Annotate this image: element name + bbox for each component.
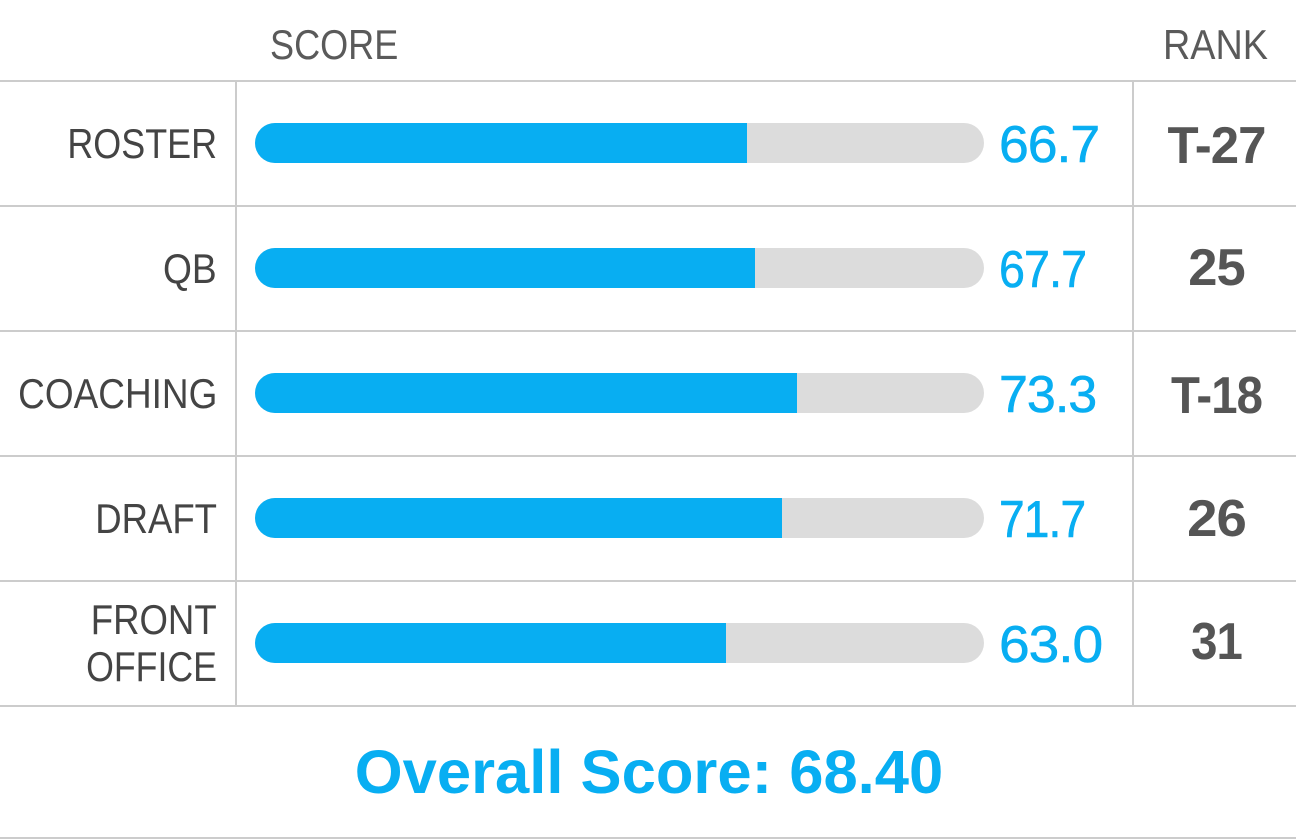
row label: QB: QB: [163, 245, 217, 292]
rank: draft: 26: [1187, 490, 1246, 548]
rank: roster: T-27: [1167, 117, 1266, 175]
rank: QB: 25: [1188, 239, 1245, 297]
bar: draft: [255, 498, 984, 538]
rank: front office: 31: [1191, 613, 1242, 671]
bar: roster: [255, 123, 984, 163]
bar: front office: [255, 623, 984, 663]
bar: coaching: [255, 373, 984, 413]
heading: rank column: RANK: [1163, 21, 1268, 68]
bar: QB: [255, 248, 984, 288]
row label: roster: ROSTER: [67, 120, 217, 167]
score: coaching: 73.3: [999, 366, 1096, 424]
row label: front office: [86, 596, 217, 690]
score: draft: 71.7: [999, 491, 1085, 549]
heading: score column: SCORE: [270, 21, 398, 68]
score: QB: 67.7: [999, 241, 1086, 299]
score: roster: 66.7: [999, 116, 1099, 174]
score: front office: 63.0: [999, 616, 1102, 674]
rank: coaching: T-18: [1171, 367, 1262, 425]
row label: front office: FRONT: [91, 596, 217, 643]
row label: draft: DRAFT: [95, 495, 217, 542]
row label: coaching: COACHING: [18, 370, 217, 417]
overall score: Overall Score: 68.40: [355, 738, 943, 806]
row label: front office: OFFICE: [86, 643, 217, 690]
